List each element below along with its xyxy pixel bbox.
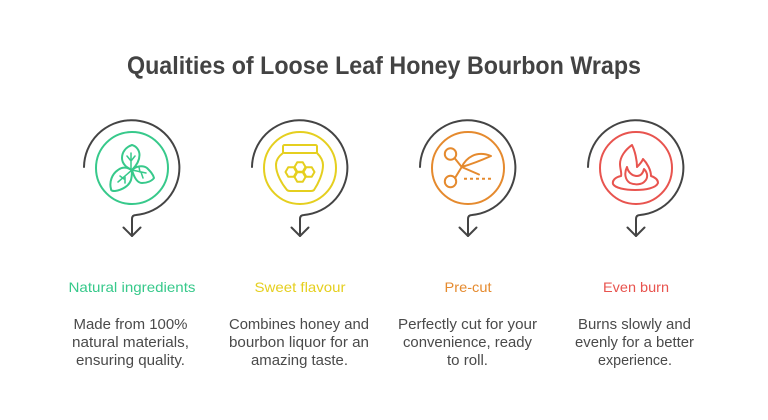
panel: natural ingredients: [68, 120, 196, 369]
icon: scissors in circle: [432, 132, 504, 204]
description: Perfectly cut for your: [398, 317, 537, 333]
description: Combines honey and: [229, 317, 369, 333]
description: to roll.: [447, 353, 488, 369]
heading: Sweet flavour: [254, 279, 346, 295]
description: Burns slowly and: [578, 317, 691, 333]
arrow: spiral into down arrow: [588, 120, 683, 236]
heading: Natural ingredients: [68, 279, 196, 295]
panel: even burn: [575, 120, 694, 369]
heading: Pre-cut: [444, 279, 492, 295]
title: Qualities of Loose Leaf Honey Bourbon Wraps: [127, 52, 641, 80]
description: evenly for a better: [575, 335, 694, 351]
arrow: spiral into down arrow: [84, 120, 179, 236]
description: bourbon liquor for an: [229, 335, 369, 351]
description: amazing taste.: [251, 353, 348, 369]
arrow: spiral into down arrow: [420, 120, 515, 236]
icon: flame in circle: [600, 132, 672, 204]
description: ensuring quality.: [76, 353, 185, 369]
description: experience.: [598, 353, 672, 369]
arrow: spiral into down arrow: [252, 120, 347, 236]
description: Made from 100%: [74, 317, 188, 333]
description: convenience, ready: [403, 335, 533, 351]
description: natural materials,: [72, 335, 189, 351]
icon: three leaves in circle: [96, 132, 168, 204]
heading: Even burn: [603, 279, 669, 295]
panel: sweet flavour: [229, 120, 369, 369]
icon: honey jar in circle: [264, 132, 336, 204]
panel: pre-cut: [398, 120, 537, 369]
